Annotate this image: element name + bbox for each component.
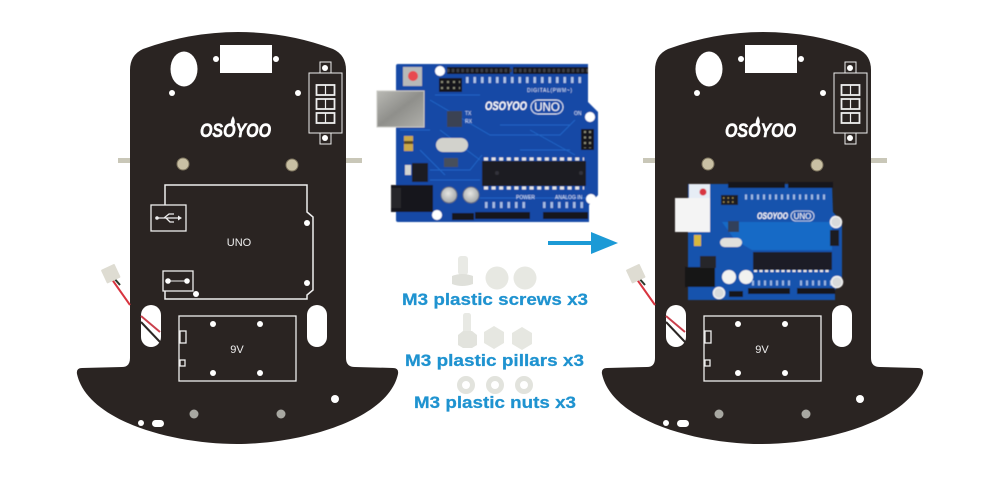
label: nuts: M3 plastic nuts x3 <box>414 394 576 412</box>
mounting screws <box>702 158 823 171</box>
power jack outline box <box>163 271 193 291</box>
regulator <box>405 163 428 182</box>
USB connector <box>377 91 424 127</box>
USB connector <box>675 198 710 232</box>
9V label: 9V <box>755 344 769 356</box>
cut-outs <box>663 45 864 427</box>
capacitors <box>441 187 479 203</box>
regulator <box>700 256 716 268</box>
silk logo: OSOYOO <box>485 99 528 113</box>
panel: Arduino UNO board <box>377 64 598 222</box>
small SMD <box>444 158 458 167</box>
ICSP left <box>439 78 462 92</box>
pillar <box>458 313 477 348</box>
bottom SMD <box>729 291 743 297</box>
yellow fuse parts <box>694 235 701 246</box>
panel: left chassis with board outline <box>77 32 398 444</box>
pillars group <box>458 313 532 350</box>
display outline <box>309 62 342 144</box>
SMD at bottom <box>452 213 474 220</box>
reset button <box>700 188 706 196</box>
UNO badge <box>791 211 814 221</box>
silk labels: ANALOG IN <box>555 195 583 201</box>
analog header <box>748 288 835 294</box>
wires through slot <box>666 316 685 342</box>
white studs <box>714 216 842 298</box>
analog and power header <box>475 212 588 219</box>
silk logo: OSOYOO <box>757 211 788 221</box>
UNO badge: UNO <box>534 102 560 114</box>
silk labels: TX <box>465 111 472 117</box>
OSOYOO logo: OSOYOO <box>725 121 796 142</box>
PCB light traces <box>722 222 832 250</box>
cut-outs <box>138 45 339 427</box>
OSOYOO logo: OSOYOO <box>200 121 271 142</box>
crystal <box>436 138 468 152</box>
power jack <box>685 267 715 287</box>
yellow fuse parts <box>404 136 413 151</box>
UNO label: UNO <box>227 237 252 249</box>
screw heads <box>486 266 536 290</box>
chassis plate <box>77 32 398 444</box>
power jack <box>391 185 433 212</box>
ICSP left <box>721 195 738 205</box>
silk labels: ON <box>574 111 582 117</box>
bottom screws <box>190 410 286 418</box>
display outline <box>834 62 867 144</box>
wire harness and connector <box>101 264 130 305</box>
silk labels <box>465 88 583 201</box>
silk labels: POWER <box>516 195 535 201</box>
UNO badge: UNO <box>794 212 811 221</box>
screws group <box>452 256 536 290</box>
digital header <box>728 182 833 188</box>
USB chip <box>728 221 739 232</box>
wire harness and connector <box>626 264 655 305</box>
nuts <box>460 378 530 392</box>
microcontroller <box>753 252 832 271</box>
UNO board outline <box>165 185 313 299</box>
label: pillars: M3 plastic pillars x3 <box>405 352 584 370</box>
hex pillars <box>484 326 532 350</box>
capacitors <box>722 270 753 284</box>
crystal <box>720 238 742 247</box>
white top corner <box>689 184 710 200</box>
label: screws: M3 plastic screws x3 <box>402 291 588 309</box>
mounting screws <box>177 158 298 171</box>
reset button <box>403 67 422 86</box>
board holes <box>432 66 596 220</box>
wires through slot <box>141 316 160 342</box>
screw <box>452 256 473 286</box>
PCB <box>396 64 598 222</box>
ICSP right <box>581 129 594 150</box>
panel: right chassis with board mounted <box>602 32 923 444</box>
axles <box>118 158 362 163</box>
bottom screws <box>714 410 810 418</box>
USB interface chip <box>447 111 462 127</box>
9V battery outline <box>704 316 821 381</box>
analog pin labels <box>752 280 832 286</box>
9V label: 9V <box>230 344 244 356</box>
chassis plate <box>602 32 923 444</box>
silk labels: DIGITAL(PWM~) <box>527 88 572 94</box>
digital header <box>447 67 588 74</box>
mounted Arduino UNO board <box>675 184 842 300</box>
9V battery outline <box>179 316 296 381</box>
ICSP right <box>830 230 839 246</box>
main microcontroller <box>482 159 586 188</box>
PCB traces <box>400 95 590 198</box>
arrow <box>548 232 618 254</box>
PCB <box>688 184 842 300</box>
axles <box>643 158 887 163</box>
digital pin labels <box>466 77 583 83</box>
UNO badge <box>531 100 563 114</box>
digital pin labels <box>745 194 829 200</box>
USB outline box <box>151 205 186 231</box>
silk labels: RX <box>465 119 473 125</box>
analog pin labels <box>485 202 587 208</box>
